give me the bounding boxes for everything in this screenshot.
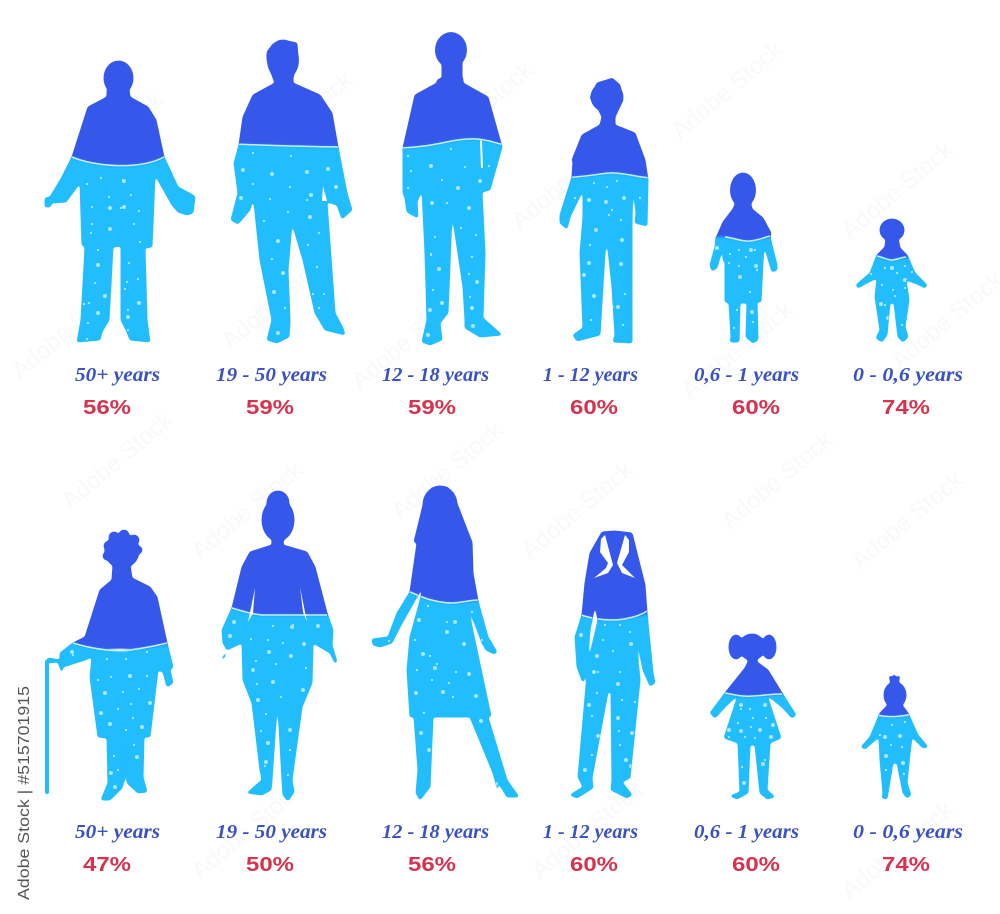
watermark tiles: Adobe Stock bbox=[387, 416, 509, 525]
figure: woman 19-50 years bbox=[215, 488, 340, 876]
figure: baby boy 0-0,6 years bbox=[850, 215, 963, 419]
figure: small girl 0,6-1 years bbox=[694, 630, 800, 876]
value: 59%: 59% bbox=[246, 397, 294, 419]
label: 1 - 12 years: 1 - 12 years bbox=[543, 364, 638, 386]
figure: girl 1-12 years bbox=[543, 528, 660, 876]
figure: man 19-50 years bbox=[216, 35, 360, 419]
figure: boy 0,6-1 years bbox=[694, 170, 799, 419]
value: 47%: 47% bbox=[83, 854, 131, 876]
watermark tiles: Adobe Stock bbox=[847, 466, 969, 575]
figure: baby girl 0-0,6 years bbox=[853, 670, 963, 876]
watermark tiles: Adobe Stock bbox=[7, 276, 129, 385]
silhouette: woman bbox=[222, 490, 337, 800]
label: 0,6 - 1 years: 0,6 - 1 years bbox=[694, 821, 799, 843]
watermark tiles: Adobe Stock bbox=[237, 66, 359, 175]
silhouette: small boy bbox=[710, 172, 778, 343]
watermark tiles: Adobe Stock bbox=[837, 796, 959, 905]
silhouette: man 50+ bbox=[40, 55, 200, 350]
value: 56%: 56% bbox=[408, 854, 456, 876]
white gaps: girl pigtails bbox=[594, 535, 635, 578]
value: 60%: 60% bbox=[570, 397, 618, 419]
watermark tiles: Adobe Stock bbox=[347, 286, 469, 395]
silhouette: teen boy bbox=[402, 32, 502, 346]
silhouette: baby girl bbox=[862, 674, 928, 800]
label: 50+ years: 50+ years bbox=[75, 821, 160, 843]
watermark tiles: Adobe Stock bbox=[517, 456, 639, 565]
silhouette: small girl bbox=[710, 634, 796, 800]
watermark tiles: Adobe Stock bbox=[717, 426, 839, 535]
label: 12 - 18 years: 12 - 18 years bbox=[382, 364, 489, 386]
watermark tiles: Adobe Stock bbox=[47, 86, 169, 195]
label: 12 - 18 years: 12 - 18 years bbox=[382, 821, 489, 843]
watermark tiles: Adobe Stock bbox=[667, 36, 789, 145]
silhouette: man 19-50 bbox=[230, 40, 352, 344]
label: 1 - 12 years: 1 - 12 years bbox=[543, 821, 638, 843]
watermark tiles: Adobe Stock bbox=[837, 136, 959, 245]
label: 0 - 0,6 years: 0 - 0,6 years bbox=[853, 364, 963, 386]
figure: teen girl 12-18 years bbox=[372, 486, 518, 871]
label: 0,6 - 1 years: 0,6 - 1 years bbox=[694, 364, 799, 386]
label: 50+ years: 50+ years bbox=[75, 364, 160, 386]
watermark tiles: Adobe Stock bbox=[527, 776, 649, 885]
value: 56%: 56% bbox=[83, 397, 131, 419]
figure: man 50+ years bbox=[40, 55, 200, 419]
figure: teen boy 12-18 years bbox=[382, 30, 508, 419]
watermark tiles: Adobe Stock bbox=[417, 56, 539, 165]
watermark tiles: Adobe Stock bbox=[187, 456, 309, 565]
silhouette: old woman bbox=[46, 530, 174, 801]
label: 19 - 50 years: 19 - 50 years bbox=[216, 821, 327, 843]
value: 60%: 60% bbox=[732, 854, 780, 876]
watermark tiles: Adobe Stock bbox=[677, 296, 799, 405]
figure: old woman 50+ years bbox=[40, 530, 180, 876]
watermark tiles: Adobe Stock bbox=[507, 126, 629, 235]
label: 19 - 50 years: 19 - 50 years bbox=[216, 364, 327, 386]
label: 0 - 0,6 years: 0 - 0,6 years bbox=[853, 821, 963, 843]
value: 74%: 74% bbox=[882, 397, 930, 419]
watermark tiles: Adobe Stock bbox=[217, 246, 339, 355]
value: 59%: 59% bbox=[408, 397, 456, 419]
silhouette: teen girl bbox=[372, 486, 518, 800]
value: 50%: 50% bbox=[246, 854, 294, 876]
icon: cane bbox=[45, 662, 49, 792]
white gaps: woman arms bbox=[248, 587, 307, 622]
value: 60%: 60% bbox=[732, 397, 780, 419]
vertical stock id text: Adobe Stock | #515701915 bbox=[16, 686, 33, 900]
silhouette: baby boy bbox=[856, 218, 927, 342]
value: 60%: 60% bbox=[570, 854, 618, 876]
watermark tiles: Adobe Stock bbox=[187, 776, 309, 885]
silhouette: girl bbox=[570, 530, 656, 798]
figure: boy 1-12 years bbox=[543, 75, 655, 419]
silhouette: boy bbox=[559, 78, 648, 344]
watermark tiles: Adobe Stock bbox=[57, 406, 179, 515]
value: 74%: 74% bbox=[882, 854, 930, 876]
